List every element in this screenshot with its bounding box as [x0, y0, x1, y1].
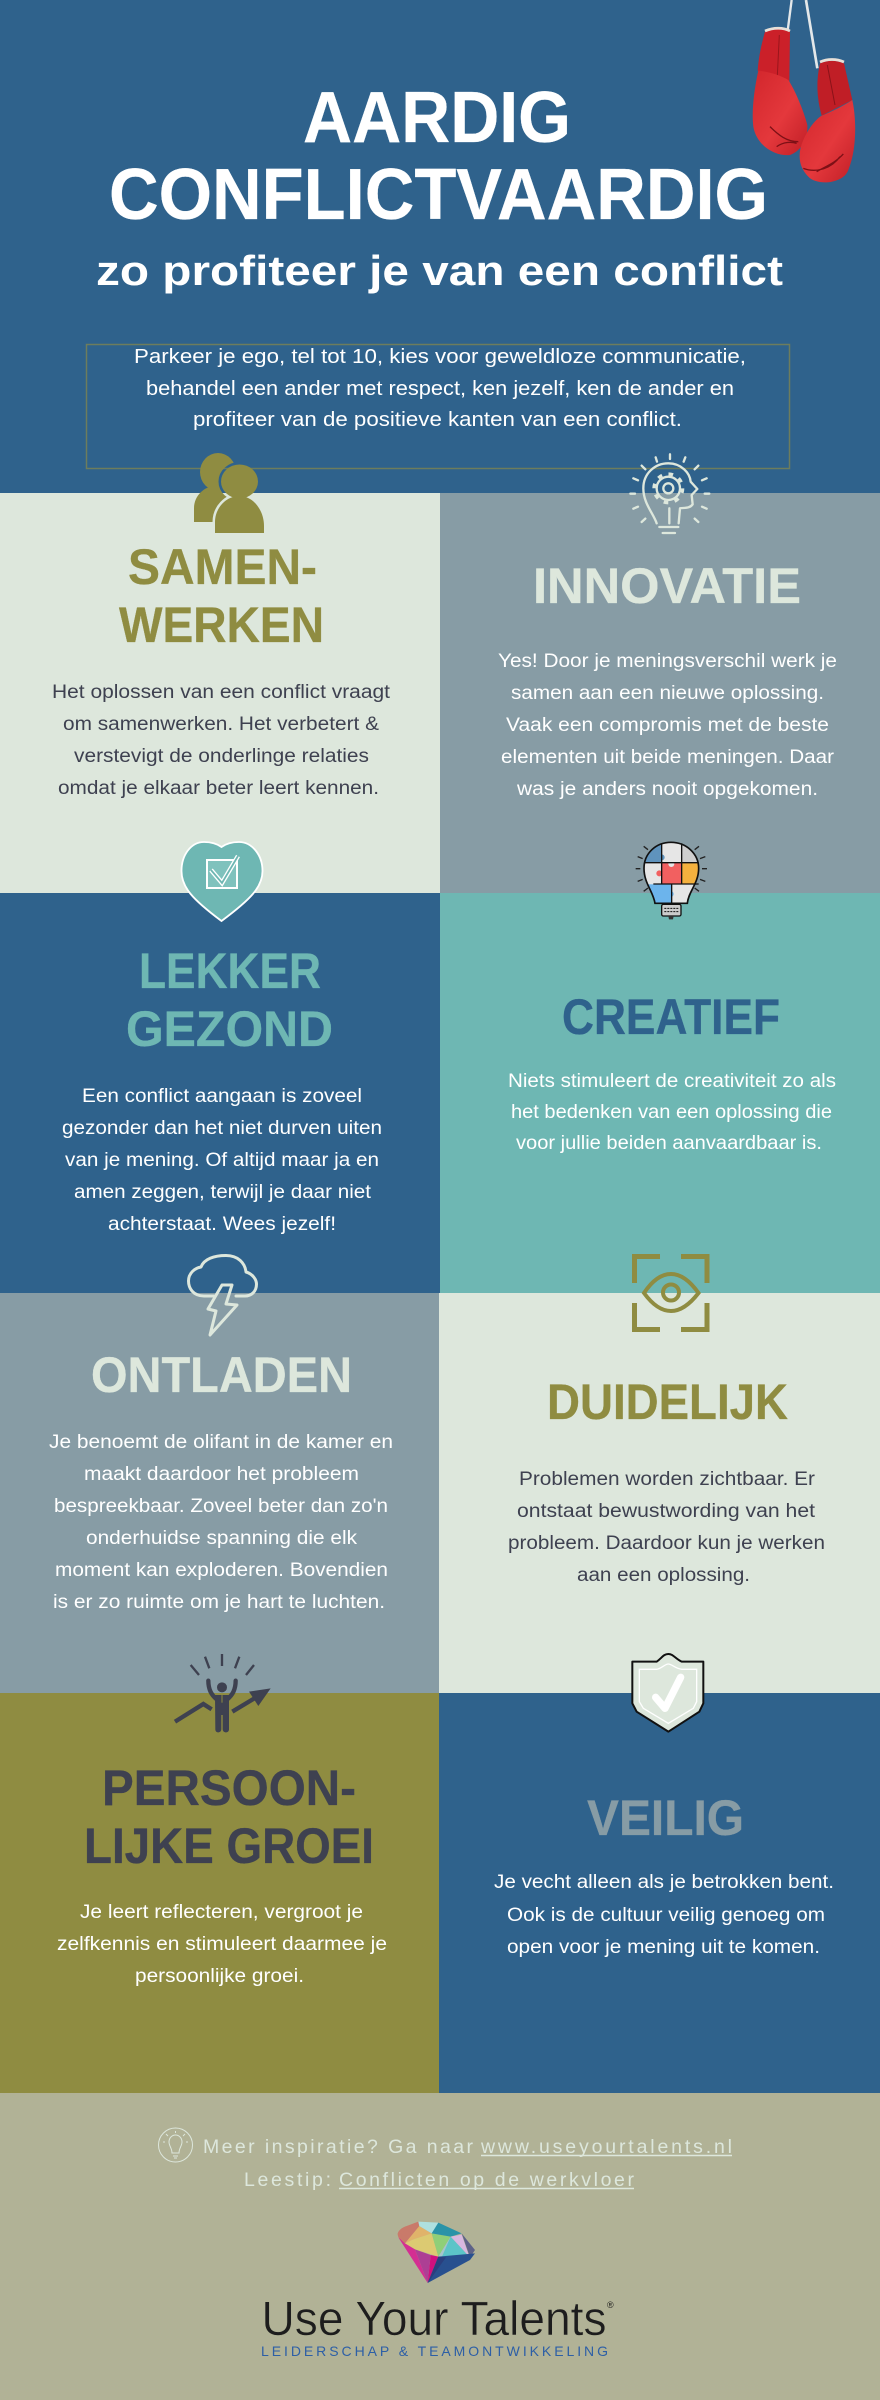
- footer panel: [0, 2093, 880, 2400]
- text: lekker gezond: van je mening. Of altijd maar ja en: [65, 1150, 379, 1171]
- header panel: [0, 0, 880, 493]
- heading: innovatie: INNOVATIE: [533, 558, 801, 614]
- text: innovatie: elementen uit beide meningen. Daar: [501, 747, 835, 768]
- heading: persoonlijke groei: LIJKE GROEI: [84, 1818, 374, 1874]
- text: innovatie: Yes! Door je meningsverschil werk je: [498, 651, 837, 672]
- text: ontladen: bespreekbaar. Zoveel beter dan zo'n: [54, 1496, 388, 1517]
- logo: wordmark: ®: [607, 2300, 614, 2310]
- icon: boxing gloves: [753, 0, 855, 182]
- text: lekker gezond: amen zeggen, terwijl je daar niet: [74, 1182, 372, 1203]
- heading: duidelijk: DUIDELIJK: [547, 1374, 788, 1430]
- text: creatief: Niets stimuleert de creativiteit zo als: [508, 1071, 836, 1092]
- icon: puzzle light bulb: [636, 842, 707, 919]
- heading: lekker gezond: GEZOND: [126, 1001, 333, 1057]
- text: reading tip link: Leestip:: [244, 2169, 331, 2191]
- text: ontladen: is er zo ruimte om je hart te luchten.: [53, 1592, 385, 1613]
- text: lekker gezond: Een conflict aangaan is zoveel: [82, 1086, 362, 1107]
- heading: persoonlijke groei: PERSOON-: [102, 1760, 356, 1816]
- text: samenwerken: omdat je elkaar beter leert kennen.: [58, 778, 379, 799]
- text: creatief: voor jullie beiden aanvaardbaar is.: [516, 1133, 822, 1154]
- panel: duidelijk: [439, 1256, 880, 1693]
- text: ontladen: moment kan exploderen. Bovendien: [55, 1560, 388, 1581]
- text: persoonlijke groei: [57, 1902, 387, 1987]
- panel: ontladen: [0, 1256, 439, 1693]
- text: innovatie: was je anders nooit opgekomen.: [516, 779, 818, 800]
- text: ontladen: [49, 1432, 393, 1613]
- heading: veilig: VEILIG: [587, 1790, 744, 1846]
- text: ontladen: onderhuidse spanning die elk: [86, 1528, 358, 1549]
- panel: samenwerken: [0, 453, 440, 893]
- heading: ontladen: ONTLADEN: [91, 1347, 352, 1403]
- intro text box: profiteer van de positieve kanten van een conflict.: [193, 408, 682, 431]
- text: creatief: het bedenken van een oplossing die: [511, 1102, 832, 1123]
- heading: lekker gezond: [126, 943, 333, 1057]
- title: CONFLICTVAARDIG: [109, 155, 768, 235]
- text: creatief: [508, 1071, 836, 1154]
- heading: samen-werken: SAMEN-: [128, 539, 317, 595]
- icon: head bulb with gear: [630, 454, 709, 533]
- icon: heart with checkbox: [182, 842, 262, 921]
- text: innovatie: Vaak een compromis met de beste: [506, 715, 829, 736]
- text: veilig: Ook is de cultuur veilig genoeg om: [507, 1905, 825, 1926]
- heading: persoonlijke groei: [84, 1760, 374, 1874]
- text: duidelijk: probleem. Daardoor kun je werken: [508, 1533, 825, 1554]
- text: veilig: open voor je mening uit te komen.: [507, 1937, 820, 1958]
- text: samenwerken: Het oplossen van een conflict vraagt: [52, 682, 391, 703]
- logo: wordmark: LEIDERSCHAP & TEAMONTWIKKELING: [261, 2343, 608, 2359]
- title: AARDIG: [303, 78, 571, 158]
- panel: lekker gezond: [0, 842, 440, 1293]
- text: duidelijk: aan een oplossing.: [577, 1565, 750, 1586]
- text: duidelijk: ontstaat bewustwording van het: [517, 1501, 816, 1522]
- text: samenwerken: [52, 682, 391, 799]
- icon: person with rising arrow: [175, 1654, 271, 1732]
- text: veilig: Je vecht alleen als je betrokken bent.: [494, 1872, 834, 1893]
- panel: creatief: [440, 842, 880, 1293]
- panel: veilig: [439, 1654, 880, 2093]
- intro text box: behandel een ander met respect, ken jezelf, ken de ander en: [146, 377, 734, 400]
- logo: coloured gem: [398, 2222, 475, 2283]
- panel: innovatie: [440, 454, 880, 893]
- text: reading tip link: Conflicten op de werkvloer: [339, 2169, 634, 2191]
- text: website link: www.useyourtalents.nl: [480, 2136, 732, 2158]
- text: lekker gezond: gezonder dan het niet durven uiten: [62, 1118, 382, 1139]
- text: website link: [203, 2136, 732, 2158]
- text: website link: Meer inspiratie? Ga naar: [203, 2136, 474, 2158]
- intro text box: Parkeer je ego, tel tot 10, kies voor geweldloze communicatie,: [134, 345, 746, 368]
- text: samenwerken: verstevigt de onderlinge relaties: [74, 746, 369, 767]
- intro text box: [86, 344, 790, 468]
- heading: samen-werken: WERKEN: [119, 597, 324, 653]
- icon: shield with check: [632, 1654, 703, 1732]
- heading: samen-werken: [119, 539, 324, 653]
- icon: small light bulb in circle: [158, 2128, 192, 2162]
- text: ontladen: maakt daardoor het probleem: [84, 1464, 359, 1485]
- text: duidelijk: Problemen worden zichtbaar. Er: [519, 1469, 816, 1490]
- title: [109, 78, 768, 235]
- text: innovatie: samen aan een nieuwe oplossing.: [511, 683, 824, 704]
- text: samenwerken: om samenwerken. Het verbetert &: [63, 714, 379, 735]
- panel: persoonlijke groei: [0, 1654, 439, 2093]
- text: veilig: [494, 1872, 834, 1958]
- heading: creatief: CREATIEF: [562, 989, 780, 1045]
- text: innovatie: [498, 651, 837, 800]
- icon: eye in focus frame: [634, 1256, 707, 1330]
- text: persoonlijke groei: persoonlijke groei.: [135, 1966, 304, 1987]
- icon: two people: [194, 453, 264, 533]
- logo: wordmark: Use Your Talents: [262, 2293, 606, 2346]
- text: lekker gezond: achterstaat. Wees jezelf!: [108, 1214, 336, 1235]
- icon: cloud with lightning: [188, 1256, 256, 1335]
- text: lekker gezond: [62, 1086, 382, 1235]
- text: persoonlijke groei: zelfkennis en stimuleert daarmee je: [57, 1934, 387, 1955]
- text: duidelijk: [508, 1469, 825, 1586]
- text: persoonlijke groei: Je leert reflecteren, vergroot je: [80, 1902, 363, 1923]
- text: ontladen: Je benoemt de olifant in de kamer en: [49, 1432, 393, 1453]
- heading: lekker gezond: LEKKER: [139, 943, 321, 999]
- subtitle: zo profiteer je van een conflict: [96, 247, 783, 294]
